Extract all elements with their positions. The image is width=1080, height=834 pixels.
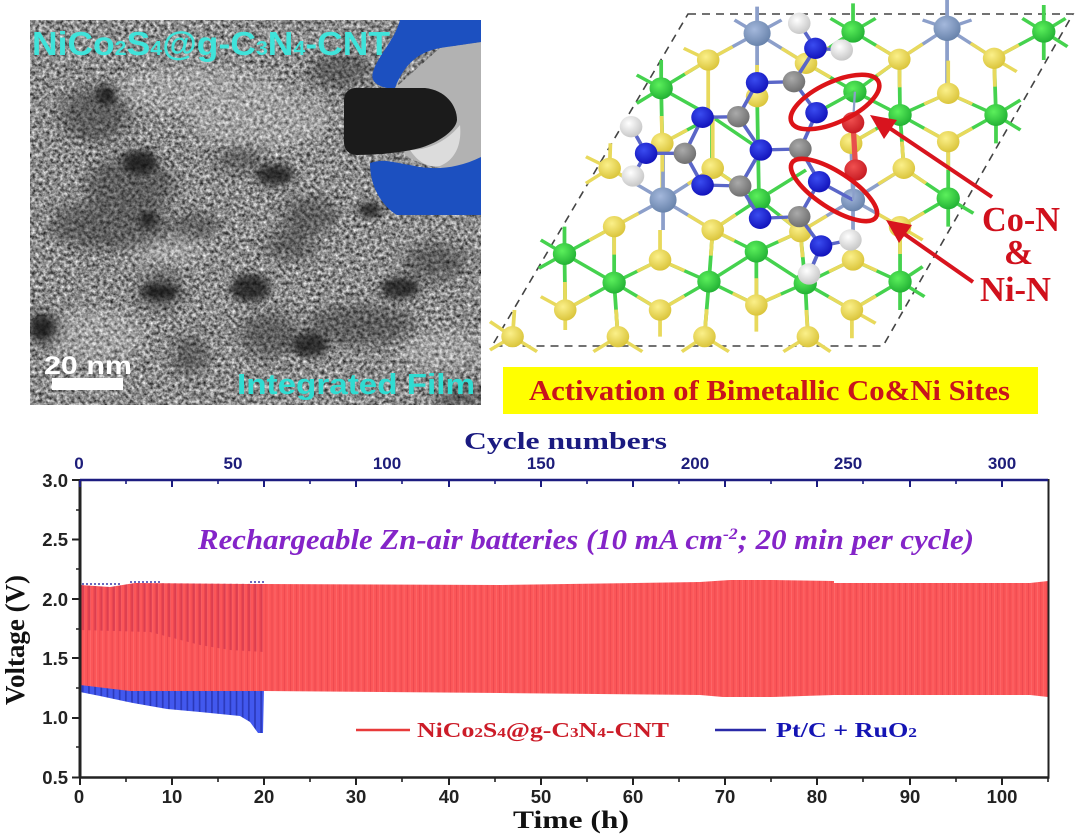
top axis labels: 250 <box>834 454 862 473</box>
x axis labels: 100 <box>987 786 1017 807</box>
hydrogen atoms <box>620 13 862 285</box>
highlight ellipse: lower site <box>782 148 886 232</box>
x axis labels: 80 <box>807 786 827 807</box>
x axis labels: 10 <box>162 786 182 807</box>
oxygen atoms <box>842 112 867 181</box>
top axis labels: 200 <box>681 454 709 473</box>
x axis title: Time (h) <box>513 807 629 834</box>
carbon atoms <box>674 71 812 227</box>
top axis labels <box>74 454 1016 473</box>
y axis title: Voltage (V) <box>0 575 30 705</box>
legend: NiCo2S4@g-C3N4-CNT: NiCo 2S4@g-C 3N4-CNT <box>417 718 669 742</box>
TEM label: integrated film: Integrated Film <box>237 369 475 401</box>
top axis labels: 150 <box>527 454 555 473</box>
TEM particles and shading <box>27 52 485 409</box>
scale bar <box>52 378 123 390</box>
banner: activation of bimetallic sites <box>503 367 1038 414</box>
green cobalt atoms <box>553 21 1055 294</box>
lattice bonds and atoms <box>490 0 1067 352</box>
y axis labels: 2.5 <box>42 529 68 550</box>
TEM label: material name: NiCo 2S4@g-C 3N4-CNT <box>32 25 390 62</box>
top axis labels: 50 <box>224 454 242 473</box>
top axis title: Cycle numbers <box>464 429 667 455</box>
x axis labels: 20 <box>254 786 274 807</box>
label: Co-N & Ni-N: Co-N <box>982 200 1060 239</box>
chart annotation: ; 20 min per cycle) <box>738 525 974 556</box>
chart axes <box>72 479 1050 785</box>
y axis labels <box>42 470 68 788</box>
series: NiCo2S4@g-C3N4-CNT <box>80 580 1048 697</box>
unit cell outline <box>492 14 1073 346</box>
chart annotation: -2 <box>723 526 738 543</box>
top axis labels: 300 <box>988 454 1016 473</box>
x axis labels: 70 <box>715 786 735 807</box>
legend: Pt/C + RuO2: Pt/C + RuO 2 <box>776 718 917 742</box>
x axis labels: 90 <box>900 786 920 807</box>
carbon nitride bonds <box>631 23 856 274</box>
series: Pt/C + RuO2 <box>80 684 264 733</box>
x axis labels: 0 <box>74 786 84 807</box>
x axis labels: 60 <box>623 786 643 807</box>
label: Co-N & Ni-N: & <box>1004 233 1033 272</box>
y axis labels: 1.5 <box>42 648 68 669</box>
chart: voltage cycling <box>0 429 1050 834</box>
scale bar label: 20 nm <box>44 352 132 380</box>
arrow: to lower site <box>886 220 973 282</box>
y axis labels: 2.0 <box>42 589 68 610</box>
label: Co-N & Ni-N <box>980 200 1060 309</box>
arrow: to upper site <box>870 115 992 197</box>
top axis labels: 0 <box>74 454 84 473</box>
y axis labels: 1.0 <box>42 707 68 728</box>
top axis labels: 100 <box>373 454 401 473</box>
nitrogen atoms <box>635 38 832 257</box>
x axis labels: 30 <box>346 786 366 807</box>
label: Co-N & Ni-N: Ni-N <box>980 270 1051 309</box>
chart annotation: Rechargeable Zn-air batteries (10 mA cm <box>198 525 675 556</box>
x axis labels: 40 <box>439 786 459 807</box>
yellow sulfur atoms <box>501 48 1005 347</box>
highlight ellipse: upper site <box>783 64 887 140</box>
x axis labels <box>74 786 1017 807</box>
panel: TEM micrograph <box>27 20 485 409</box>
blue-grey nickel atoms <box>650 16 961 213</box>
inset: gloved hand holding black film <box>344 20 481 215</box>
y axis labels: 3.0 <box>42 470 68 491</box>
crystal structure model <box>490 0 1073 352</box>
x axis labels: 50 <box>531 786 551 807</box>
banner: activation of bimetallic sites: Activation of Bimetallic Co&Ni Sites <box>529 375 1010 407</box>
y axis labels: 0.5 <box>42 767 68 788</box>
